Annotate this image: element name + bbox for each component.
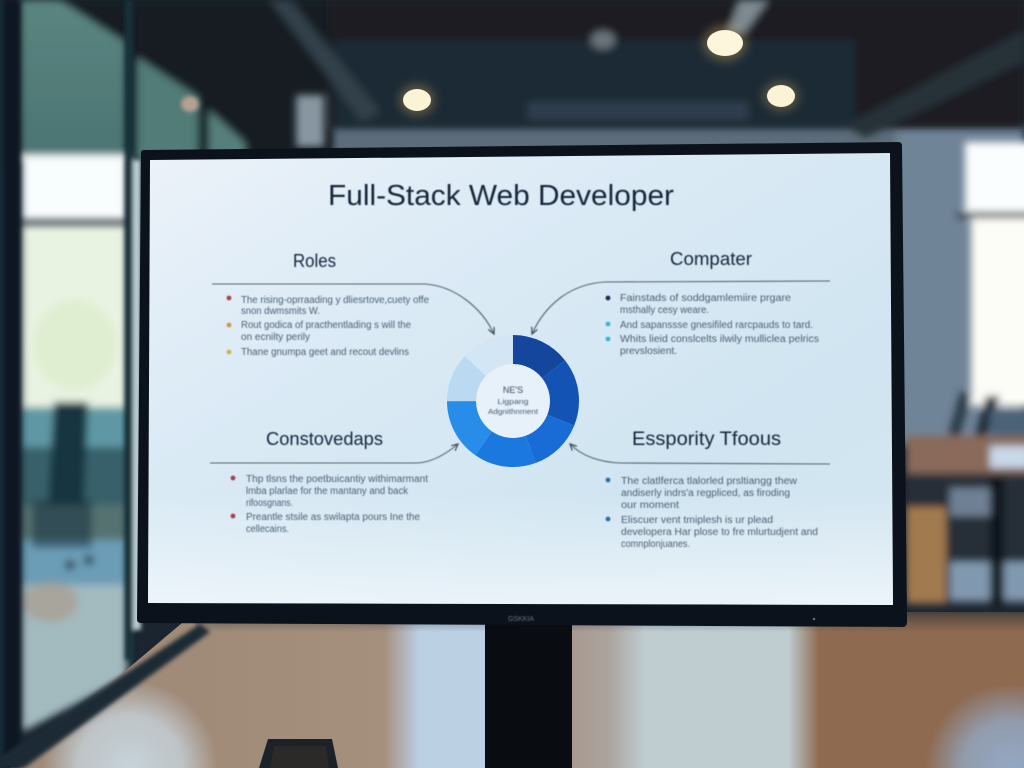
donut centre disc bbox=[476, 364, 550, 438]
right windows and table bbox=[906, 142, 1024, 608]
light: right bbox=[763, 81, 799, 111]
donut chart bbox=[462, 350, 564, 452]
panel: roles bbox=[212, 251, 494, 358]
constovedaps text: Preantle stsile as swilapta pours Ine the bbox=[246, 512, 420, 523]
esspority text: andiserly indrs'a regpliced, as firoding bbox=[621, 488, 790, 499]
panel: esspority tfoous bbox=[570, 429, 830, 550]
heading: roles: Roles bbox=[293, 251, 336, 271]
screen bbox=[148, 153, 893, 605]
esspority text bbox=[621, 476, 818, 550]
glass wall base rail bbox=[0, 624, 210, 768]
ceiling bbox=[268, 0, 1024, 147]
constovedaps text: lmba plarlae for the mantany and back bbox=[246, 486, 409, 497]
arrow: esspority to donut bbox=[570, 444, 830, 464]
esspority text: The clatlferca tlalorled prsltiangg thew bbox=[621, 476, 798, 487]
roles text: The rising-oprraading y dliesrtove,cuety offe bbox=[241, 295, 429, 306]
arrow: compater to donut bbox=[532, 281, 830, 334]
esspority text: our moment bbox=[621, 500, 679, 511]
donut centre label bbox=[488, 385, 539, 416]
compater text: And sapanssse gnesifiled rarcpauds to tard. bbox=[620, 320, 813, 331]
heading: constovedaps: Constovedaps bbox=[266, 429, 383, 449]
constovedaps text: rifoosgnans. bbox=[246, 498, 293, 509]
compater text: Whits lieid conslcelts ilwily mulliclea pelrics bbox=[620, 334, 819, 345]
monitor stand bbox=[485, 620, 572, 768]
compater text: prevslosient. bbox=[620, 346, 677, 357]
light: centre bbox=[703, 25, 747, 61]
constovedaps text: cellecains. bbox=[246, 524, 289, 535]
esspority text: developera Har plose to fre mlurtudjent and bbox=[621, 527, 818, 538]
compater bullets bbox=[606, 296, 610, 341]
left glass wall bbox=[0, 0, 332, 730]
bezel bbox=[137, 142, 907, 627]
heading: esspority tfoous: Esspority Tfoous bbox=[632, 429, 781, 450]
panel: constovedaps bbox=[210, 429, 458, 535]
roles text: Rout godica of practhentlading s will the bbox=[241, 320, 411, 331]
back wall bbox=[330, 125, 1024, 445]
light: distant reflection bbox=[181, 96, 199, 112]
camera object in foreground bbox=[259, 739, 338, 768]
power led bbox=[813, 618, 815, 620]
roles bullets bbox=[227, 296, 231, 354]
ceiling lights bbox=[181, 25, 799, 116]
compater text: Fainstads of soddgamlemiire prgare bbox=[620, 293, 791, 304]
wooden floor bbox=[10, 612, 1024, 768]
panel: compater bbox=[532, 249, 830, 357]
arrow: roles to donut bbox=[212, 284, 494, 334]
roles text: snon dwmsmits W. bbox=[241, 306, 320, 317]
roles text: Thane gnumpa geet and recout devlins bbox=[241, 347, 409, 358]
roles text bbox=[241, 295, 429, 358]
compater text bbox=[620, 293, 819, 357]
compater text: msthally cesy weare. bbox=[620, 305, 709, 316]
heading: compater: Compater bbox=[670, 249, 752, 269]
light: left bbox=[399, 84, 435, 116]
esspority bullets bbox=[606, 478, 610, 521]
esspority text: Eliscuer vent tmiplesh is ur plead bbox=[621, 515, 773, 526]
constovedaps text: Thp tlsns the poetbuicantiy withimarmant bbox=[246, 474, 428, 485]
constovedaps text bbox=[246, 474, 428, 535]
arrow: constovedaps to donut bbox=[210, 444, 458, 463]
roles text: on ecnilty perily bbox=[241, 332, 310, 343]
title: Full-Stack Web Developer bbox=[328, 180, 674, 212]
donut centre label: Adgnithnment bbox=[488, 407, 539, 416]
constovedaps bullets bbox=[231, 476, 235, 518]
donut centre label: NE'S bbox=[503, 385, 523, 395]
brand label: GSKKIA bbox=[508, 616, 534, 623]
donut centre label: Ligpang bbox=[498, 397, 528, 406]
left glass posts bbox=[0, 0, 141, 768]
esspority text: comnplonjuanes. bbox=[621, 539, 690, 550]
